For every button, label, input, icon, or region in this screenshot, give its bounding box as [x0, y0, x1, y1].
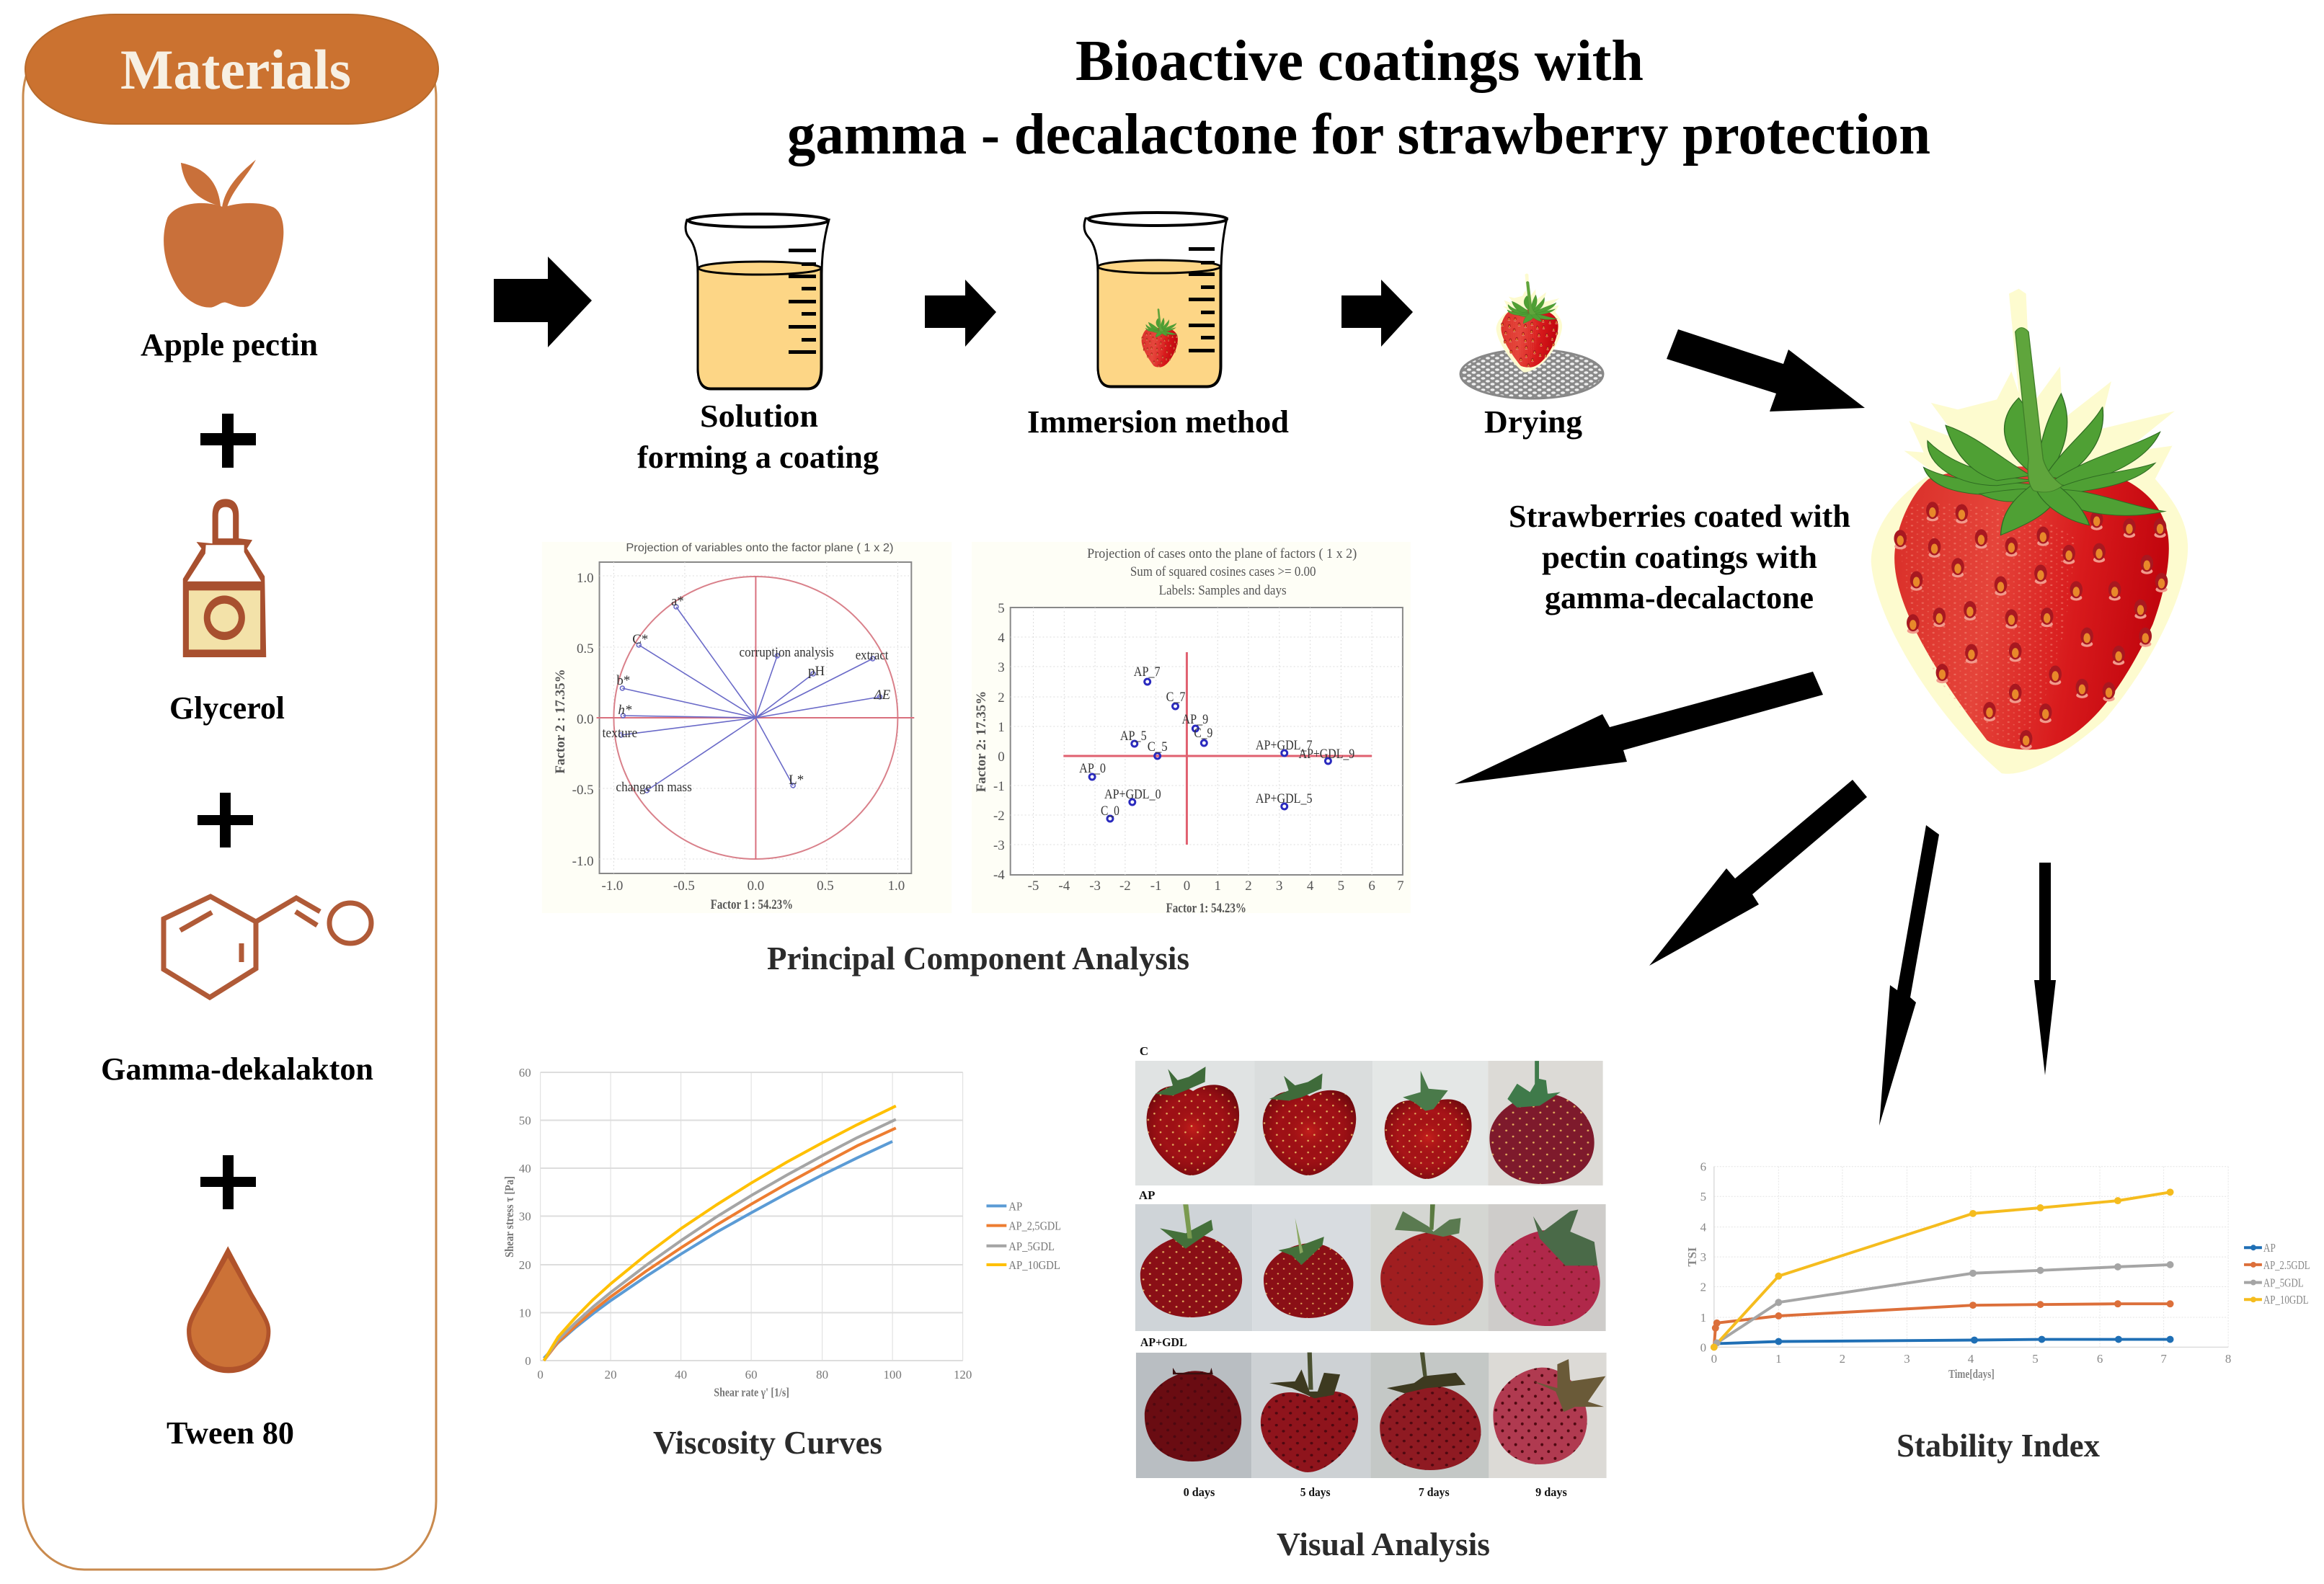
chart: PCA variables: -1.0: [572, 854, 594, 869]
chart: PCA cases: AP_5: [1120, 729, 1147, 744]
chart: PCA cases: 0: [1184, 878, 1190, 894]
chart: PCA variables: 0.5: [817, 878, 834, 894]
icon: glycerol bottle: [183, 499, 266, 657]
chart: PCA cases: C_7: [1166, 690, 1185, 705]
chart: PCA cases: 5: [1338, 878, 1344, 894]
chart: stability index: 1: [1700, 1311, 1706, 1325]
arrow: to PCA: [1455, 672, 1823, 784]
chart: PCA cases: -2: [993, 809, 1005, 824]
beaker: immersion with strawberry: [1084, 213, 1227, 387]
chart: viscosity curves: 20: [519, 1258, 531, 1272]
chart: PCA variables: 0.5: [577, 641, 594, 657]
label: gamma-dekalakton: Gamma-dekalakton: [101, 1051, 373, 1087]
chart: PCA variables: 0.0: [577, 712, 594, 727]
legend: stability: AP_10GDL: [2263, 1293, 2309, 1307]
chart: PCA cases: -2: [1119, 878, 1131, 894]
arrow: materials to solution: [494, 257, 592, 347]
chart: stability index: 7: [2160, 1352, 2167, 1366]
chart: PCA variables: Projection of variables onto the factor plane ( 1 x 2): [626, 542, 893, 554]
chart: PCA cases: 2: [998, 690, 1005, 706]
row: C: C: [1140, 1044, 1148, 1058]
row: AP: AP: [1139, 1188, 1155, 1202]
legend: stability: [2244, 1241, 2310, 1307]
chart: PCA cases: Sum of squared cosines cases >= 0.00: [1130, 564, 1316, 579]
icon: plus: [198, 793, 253, 847]
legend: viscosity: [986, 1199, 1061, 1272]
icon: plus: [200, 414, 256, 468]
caption: visual analysis: Visual Analysis: [1277, 1526, 1490, 1562]
chart: PCA variables: b*: [616, 673, 630, 688]
chart: PCA variables: ΔE: [874, 688, 891, 703]
chart: PCA cases: 4: [998, 631, 1005, 646]
chart: viscosity curves: [502, 1066, 1061, 1399]
legend: stability: AP: [2263, 1241, 2276, 1255]
icon: plus: [200, 1155, 256, 1209]
chart: viscosity curves: 80: [816, 1368, 828, 1381]
label: solution: Solution: [700, 399, 818, 434]
label: solution: forming a coating: [637, 440, 879, 475]
chart: stability index: 1: [1775, 1352, 1782, 1366]
chart: PCA cases: 6: [1368, 878, 1375, 894]
chart: viscosity curves: 0: [525, 1354, 531, 1368]
chart: viscosity curves: 0: [537, 1368, 544, 1381]
caption: viscosity curves: Viscosity Curves: [653, 1425, 882, 1461]
icon: drying rack with strawberry: [1460, 273, 1603, 399]
label: glycerol: Glycerol: [169, 690, 285, 726]
text: coated strawberries: gamma-decalactone: [1545, 580, 1814, 615]
row: C: [1135, 1044, 1603, 1185]
chart: PCA variables: a*: [671, 594, 684, 609]
label: immersion method: Immersion method: [1027, 404, 1289, 440]
chart: PCA variables: change in mass: [616, 780, 692, 795]
label: drying: Drying: [1484, 404, 1582, 440]
icon: benzene ring molecule: [164, 896, 371, 997]
icon: drop: [187, 1246, 270, 1373]
arrow: immersion to drying: [1341, 280, 1413, 347]
chart: PCA cases: AP_7: [1134, 664, 1161, 680]
chart: PCA cases: C_9: [1194, 726, 1212, 741]
chart: PCA cases: 2: [1245, 878, 1252, 894]
illustration: coated strawberry: [1871, 289, 2188, 774]
chart: PCA variables: Factor 1 : 54.23%: [711, 897, 793, 912]
chart: PCA cases: -5: [1028, 878, 1039, 894]
chart: stability index: 0: [1700, 1340, 1706, 1354]
chart: stability index: 3: [1904, 1352, 1910, 1366]
chart: stability index: 5: [1700, 1190, 1706, 1203]
chart: PCA cases: 1: [1214, 878, 1221, 894]
chart: viscosity curves: 20: [605, 1368, 617, 1381]
chart: viscosity curves: 100: [883, 1368, 902, 1381]
arrow: to stability index: [2034, 863, 2056, 1075]
chart: viscosity curves: 60: [519, 1066, 531, 1080]
caption: principal component analysis: Principal Component Analysis: [767, 940, 1189, 976]
legend: viscosity: AP_2,5GDL: [1008, 1219, 1061, 1233]
row: AP+GDL: AP+GDL: [1140, 1335, 1187, 1349]
chart: PCA cases: Projection of cases onto the plane of factors ( 1 x 2): [1087, 546, 1357, 561]
chart: PCA variables: corruption analysis: [740, 645, 834, 660]
materials header pill: Materials: [120, 38, 351, 101]
chart: viscosity curves: Shear stress τ [Pa]: [502, 1176, 516, 1258]
icon: apple: [164, 160, 283, 308]
day labels: 7 days: [1419, 1485, 1450, 1499]
chart: stability index: 2: [1840, 1352, 1845, 1366]
row: AP+GDL: [1136, 1335, 1607, 1478]
text: coated strawberries: Strawberries coated with: [1509, 499, 1850, 534]
chart: PCA cases: -1: [993, 779, 1005, 794]
chart: PCA cases: 1: [998, 720, 1005, 735]
text: coated strawberries: [1509, 499, 1850, 615]
label: solution: [637, 399, 879, 475]
chart: PCA cases: 3: [998, 660, 1005, 675]
chart: PCA cases: -3: [1089, 878, 1101, 894]
chart: PCA cases: AP+GDL_9: [1299, 747, 1354, 762]
chart: PCA cases: AP+GDL_0: [1104, 787, 1161, 802]
chart: PCA variables: extract: [856, 648, 889, 663]
chart: viscosity curves: Shear rate γ' [1/s]: [714, 1385, 789, 1399]
chart: viscosity curves: 10: [519, 1306, 531, 1320]
arrow: drying to coated strawberry: [1667, 329, 1865, 411]
chart: stability index: Time[days]: [1948, 1367, 1995, 1381]
chart: viscosity curves: 40: [519, 1162, 531, 1175]
text: coated strawberries: pectin coatings with: [1542, 540, 1817, 575]
photo grid: visual analysis: [1135, 1044, 1607, 1499]
chart: stability index: 0: [1711, 1352, 1717, 1366]
chart: PCA variables: 0.0: [748, 878, 764, 894]
chart: stability index: 5: [2032, 1352, 2039, 1366]
chart: viscosity curves: 50: [519, 1113, 531, 1128]
chart: PCA cases: AP_0: [1079, 761, 1106, 776]
row: AP: [1135, 1188, 1606, 1331]
chart: PCA cases: -3: [993, 838, 1005, 853]
chart: stability index: 3: [1700, 1250, 1706, 1264]
arrow: to viscosity: [1649, 780, 1867, 966]
chart: stability index: 4: [1968, 1352, 1974, 1366]
title: gamma - decalactone for strawberry protection: [787, 103, 1930, 166]
day labels: [1184, 1485, 1567, 1499]
chart: PCA cases: -1: [1150, 878, 1162, 894]
chart: PCA cases: 4: [1307, 878, 1314, 894]
day labels: 5 days: [1300, 1485, 1331, 1499]
chart: PCA variables: -0.5: [572, 783, 594, 798]
chart: PCA cases: AP+GDL_5: [1256, 791, 1313, 806]
chart: PCA cases: -4: [1058, 878, 1070, 894]
chart: PCA variables: [542, 542, 952, 913]
arrow: solution to immersion: [925, 280, 996, 347]
panel: materials: [23, 14, 438, 1570]
legend: viscosity: AP_10GDL: [1008, 1258, 1060, 1272]
chart: PCA variables: C*: [632, 632, 648, 647]
arrow: to visual analysis / stability: [1879, 825, 1939, 1126]
chart: stability index: 6: [1700, 1160, 1706, 1174]
chart: PCA cases: C_0: [1101, 804, 1119, 819]
chart: viscosity curves: 60: [745, 1368, 758, 1381]
chart: PCA cases: Factor 2: 17.35%: [974, 691, 989, 792]
label: tween 80: Tween 80: [167, 1415, 294, 1451]
day labels: 0 days: [1184, 1485, 1215, 1499]
chart: stability index: [1685, 1160, 2310, 1381]
chart: PCA variables: L*: [789, 773, 804, 788]
chart: PCA cases: 3: [1276, 878, 1282, 894]
chart: stability index: 4: [1700, 1221, 1707, 1234]
chart: stability index: TSI: [1685, 1247, 1699, 1267]
chart: PCA variables: texture: [603, 726, 637, 741]
chart: stability index: 6: [2097, 1352, 2103, 1366]
chart: PCA variables: 1.0: [577, 571, 594, 586]
legend: viscosity: AP: [1008, 1199, 1022, 1213]
calyx leaves and stems on photos: [1155, 1061, 1605, 1412]
legend: stability: AP_5GDL: [2263, 1276, 2304, 1290]
chart: viscosity curves: 120: [954, 1368, 972, 1381]
chart: PCA cases: AP+GDL_7: [1256, 738, 1313, 753]
title: [787, 30, 1930, 166]
chart: PCA variables: h*: [618, 703, 632, 718]
chart: PCA cases: 0: [998, 749, 1005, 765]
chart: PCA variables: -0.5: [673, 878, 695, 894]
beaker: solution: [686, 214, 829, 389]
chart: PCA cases: 7: [1397, 878, 1404, 894]
chart: stability index: 2: [1700, 1281, 1706, 1294]
chart: stability index: 8: [2225, 1352, 2231, 1366]
legend: viscosity: AP_5GDL: [1008, 1240, 1055, 1253]
chart: PCA variables: 1.0: [888, 878, 905, 894]
chart: PCA cases: 5: [998, 601, 1005, 616]
chart: viscosity curves: 30: [519, 1209, 531, 1224]
chart: PCA variables: -1.0: [601, 878, 623, 894]
title: Bioactive coatings with: [1075, 30, 1644, 93]
chart: PCA cases: -4: [993, 868, 1005, 883]
chart: PCA cases: [972, 542, 1411, 916]
chart: PCA cases: Labels: Samples and days: [1159, 583, 1287, 598]
day labels: 9 days: [1535, 1485, 1567, 1499]
chart: PCA cases: Factor 1: 54.23%: [1166, 901, 1246, 916]
legend: stability: AP_2.5GDL: [2263, 1258, 2310, 1272]
chart: viscosity curves: 40: [675, 1368, 687, 1381]
chart: PCA cases: AP_9: [1181, 712, 1208, 727]
materials header pill: [25, 14, 438, 124]
chart: PCA variables: pH: [808, 664, 825, 679]
label: apple pectin: Apple pectin: [141, 327, 318, 362]
chart: PCA variables: Factor 2 : 17.35%: [553, 669, 568, 774]
chart: PCA cases: C_5: [1148, 739, 1168, 755]
caption: stability index: Stability Index: [1897, 1428, 2100, 1464]
